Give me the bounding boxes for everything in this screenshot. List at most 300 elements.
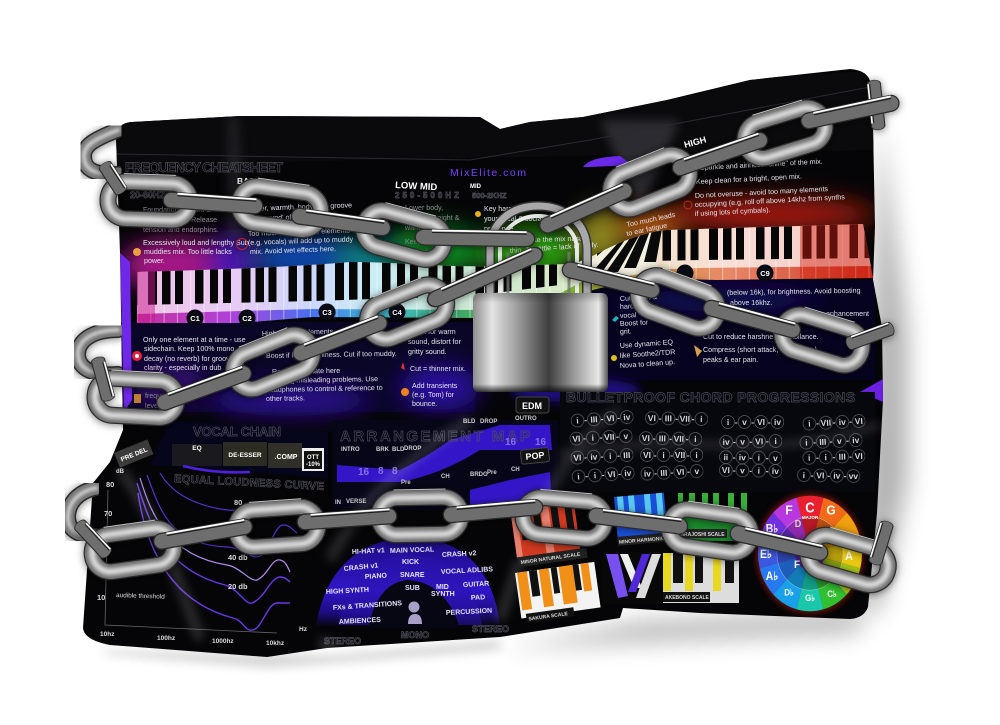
stereo field diagram: SUB xyxy=(405,585,420,592)
glossy fold highlights xyxy=(120,410,880,660)
keyboard octave markers: C1 xyxy=(190,314,200,323)
text block: bass: Power, warmth, body, and groove xyxy=(247,201,352,213)
chord row 4: - xyxy=(654,468,657,478)
module: pre delay: PRE DEL xyxy=(120,446,149,463)
chord row 4: - xyxy=(670,467,674,477)
chord row 2: - xyxy=(653,433,656,443)
chord row 4: v xyxy=(740,465,745,475)
chord row 2: VI xyxy=(755,436,763,446)
text block: mid xyxy=(484,205,676,255)
chord row 2: - xyxy=(829,436,833,446)
chord row 3: - xyxy=(687,450,690,460)
chord row 2: VII xyxy=(604,432,615,442)
chord row 4: VI xyxy=(676,467,685,477)
chord row 2: iv xyxy=(852,435,860,445)
chord row 3: VI xyxy=(855,451,863,461)
chord row 2: - xyxy=(616,431,619,442)
text block: mid: Too much leads xyxy=(626,211,676,229)
stereo field diagram: HIGH SYNTH xyxy=(326,587,369,596)
heading: frequency band names: 20-60HZ xyxy=(130,190,166,200)
chord row 4: - xyxy=(585,471,589,481)
arrangement panel: Pre xyxy=(487,470,497,476)
text block: bass tips: Higher mono elements xyxy=(262,327,334,338)
circle of fifths: C xyxy=(805,500,815,516)
chord row 2: VI xyxy=(572,433,581,444)
chord row 1: - xyxy=(832,417,836,427)
keyboard zebra fold xyxy=(592,232,655,286)
arrangement panel: CH xyxy=(441,474,450,480)
text block: high: Keep clean for a bright, open mix. xyxy=(696,172,802,186)
chord row 4: iv xyxy=(644,468,651,479)
text block: low mid: free mix. xyxy=(405,248,432,256)
scale: minor harmonic: MINOR HARMONIC SCALE xyxy=(619,534,684,546)
chord row 4: iv xyxy=(624,468,632,478)
module: OTT: OTT xyxy=(307,455,319,461)
text block: mid: your vocal & social xyxy=(484,215,544,223)
chord row 3: i xyxy=(808,453,811,463)
chord row 1: - xyxy=(600,414,604,424)
text block: low mid: warmth. xyxy=(404,224,430,232)
chord row 1: VI xyxy=(648,413,656,423)
stereo field diagram: PIANO xyxy=(365,572,388,581)
chain: bottom xyxy=(79,488,895,589)
text block: mid tips: like Soothe2/TDR xyxy=(620,348,676,360)
text block: sub tips: clarity - especially in dub xyxy=(144,364,221,372)
chord row 3: i xyxy=(609,451,612,461)
arrangement panel: 8 xyxy=(378,466,384,477)
stereo field diagram: MAIN VOCAL xyxy=(390,546,435,555)
text block: high tips: Compress (short attack, aggressive) xyxy=(703,346,817,354)
text block: low mid tips: (e.g. Tom) for xyxy=(412,391,455,399)
chord row 1: III xyxy=(590,414,598,425)
equal loudness chart: Hz xyxy=(299,626,308,633)
chain: lower hook behind bag xyxy=(68,488,96,536)
stereo field diagram: FXs & TRANSITIONS xyxy=(333,600,403,612)
circle of fifths: MAJOR xyxy=(802,515,819,521)
chord row 3: - xyxy=(617,450,620,461)
chord row 2 xyxy=(569,429,863,450)
arrangement panel: BRK xyxy=(376,447,390,453)
bag shadow xyxy=(500,120,908,648)
keyboard octave markers: C2 xyxy=(242,314,252,323)
text block: sub bass: power. xyxy=(144,257,165,265)
heading: frequency band names xyxy=(130,134,707,200)
text block: high: Sparkle and airiness "shine" of the mix. xyxy=(700,158,823,172)
heading: frequency band names: 250-500HZ xyxy=(395,191,459,200)
chord row 2: i xyxy=(591,433,594,443)
chord row 2: VII xyxy=(674,434,684,444)
chord row 4: - xyxy=(687,466,690,477)
text block: bass tips: Boost if lacking fullness. Cut if too muddy. xyxy=(266,350,397,360)
scale: minor natural: MINOR NATURAL SCALE xyxy=(520,552,581,566)
module: de-esser xyxy=(223,442,267,466)
chord row 3: i xyxy=(695,450,698,460)
chord row 3: v xyxy=(773,453,778,463)
chord row 1: - xyxy=(617,413,620,423)
text block: low mid: Keep clean to xyxy=(405,238,448,246)
chord row 1: iv xyxy=(774,417,781,427)
stereo field diagram: SYNTH xyxy=(431,591,455,598)
chord row 1: - xyxy=(659,413,662,423)
circle of fifths: A♭ xyxy=(766,571,778,583)
stereo field diagram: AMBIENCES xyxy=(339,617,381,626)
icon: listener xyxy=(408,602,422,624)
arrangement panel: OUTRO xyxy=(515,416,537,422)
text block: sub tips: sidechain. Keep 100% mono. Short xyxy=(144,345,255,353)
scale: purple xyxy=(602,552,662,604)
text block: mid tips: Nova to clean up. xyxy=(620,358,675,370)
arrangement panel: Pre xyxy=(401,480,411,486)
chord row 1: - xyxy=(692,414,695,424)
text block: bass tips xyxy=(262,327,397,403)
chord row 3: VII xyxy=(675,450,685,460)
heading: vocal chain: VOCAL CHAIN xyxy=(193,424,281,439)
chord row 4: - xyxy=(601,470,605,480)
text block: high tips: Cut to reduce harshness & sibilance. xyxy=(703,333,819,341)
text block: bass: (e.g. vocals) will add up to muddy xyxy=(248,235,354,247)
heading: frequency cheat sheet: FREQUENCY CHEATSHEET xyxy=(125,159,283,175)
circle of fifths: D♭ xyxy=(784,587,794,598)
chord row 3: - xyxy=(832,452,836,462)
heading: frequency band names: HIGH xyxy=(683,134,707,150)
chord row 4: i xyxy=(593,470,596,480)
chain: middle hook behind bag xyxy=(78,330,118,374)
text block: low mid tips: gritty sound. xyxy=(408,348,447,356)
keyboard octave markers: C4 xyxy=(392,308,403,317)
text block: bass tips: headphones to control & reference to xyxy=(266,384,383,394)
chord row 4: v xyxy=(694,466,700,476)
chord row 4: - xyxy=(766,466,769,476)
chord row 2: - xyxy=(766,436,769,446)
text block: sub tips: decay (no reverb) for groove & xyxy=(144,355,240,363)
equal loudness chart: 70 xyxy=(104,509,112,518)
text block: bass: mix. Avoid wet effects here. xyxy=(250,245,336,256)
equal loudness chart xyxy=(97,469,324,647)
stereo field diagram: HI-HAT v1 xyxy=(352,547,385,556)
chord row 4: - xyxy=(811,470,814,480)
chord row 3: - xyxy=(654,450,657,460)
chain: lower left diagonal to padlock xyxy=(94,249,535,419)
chord row 1: III xyxy=(665,413,672,423)
text block: mid: thin. Too little = lack of body. xyxy=(510,241,599,255)
chord row 2: i xyxy=(694,434,697,444)
circle of fifths: E♭ xyxy=(760,548,772,561)
chord row 4: i xyxy=(803,470,805,480)
chord row 2: - xyxy=(749,436,752,446)
bag shadow bottom xyxy=(100,640,500,668)
text block: bass xyxy=(247,201,354,256)
chord row 2: - xyxy=(733,437,736,447)
equal loudness chart: audible threshold xyxy=(116,592,165,601)
label: EDM: EDM xyxy=(522,401,542,411)
equal loudness chart: 10khz xyxy=(266,640,285,647)
text block: mid: Key harmonics of xyxy=(484,205,539,213)
chord row 2: v xyxy=(837,436,842,446)
stereo field diagram: GUITAR xyxy=(463,581,489,589)
scale: minor natural xyxy=(510,498,588,567)
chord row 3: i xyxy=(758,453,760,463)
chain: padlock to right side xyxy=(570,263,891,370)
text block: low mid tips: Add transients xyxy=(412,382,458,390)
module: pre delay xyxy=(114,439,153,468)
label: EDM xyxy=(516,397,549,413)
scale: sakura: SAKURA SCALE xyxy=(528,611,569,623)
text block: high tips: peaks & ear pain. xyxy=(703,356,758,364)
text block: bass: Too much compressed elements xyxy=(248,226,351,238)
arrangement panel: CH xyxy=(511,467,520,473)
chord row 2: - xyxy=(686,434,689,444)
chord row 2: iv xyxy=(722,437,730,447)
arrangement panel: INTRO xyxy=(341,447,360,453)
arrangement panel: BLD xyxy=(392,447,405,453)
chord row 3: - xyxy=(749,453,752,463)
text block: low mid tips: Boost for warm xyxy=(408,328,456,336)
chord row 4: - xyxy=(844,471,847,481)
text block: low mid tips xyxy=(408,328,466,408)
chord row 3: ii xyxy=(723,452,728,462)
arrangement panel: 8 xyxy=(392,466,398,477)
chord row 3: - xyxy=(600,451,604,461)
text block: sub tips xyxy=(143,336,246,408)
circle of fifths: D xyxy=(795,518,801,530)
vocal chain panel xyxy=(114,420,328,478)
colour glows above the keyboard xyxy=(120,199,875,295)
text block: low mid tips: Cut = thinner mix. xyxy=(410,365,466,373)
arrangement panel: DROP xyxy=(404,446,421,452)
text block: sub bass: muddies mix. Too little lacks xyxy=(144,248,232,256)
bag: frequency cheat sheet poster xyxy=(70,60,900,670)
chord row 1: - xyxy=(849,416,852,427)
scale: akebono xyxy=(663,553,739,603)
module: de-esser: DE-ESSER xyxy=(228,452,262,459)
arrangement panel: BRDG xyxy=(470,472,488,478)
chord row 4 xyxy=(571,463,860,484)
chord row 2: III xyxy=(659,433,666,443)
lower panel glows xyxy=(120,156,890,416)
chord row 4: - xyxy=(827,471,830,481)
chord row 3: iv xyxy=(739,452,746,462)
text block: low mid: warmth, weight & xyxy=(404,214,460,222)
chord row 4: i xyxy=(758,466,760,476)
equal loudness chart: 80 xyxy=(234,498,242,507)
chord row 2: - xyxy=(599,432,603,442)
chord row 4: - xyxy=(749,466,752,476)
chord row 3: - xyxy=(733,452,736,462)
circle of fifths: F xyxy=(794,558,801,571)
chord row 1: v xyxy=(742,417,747,427)
text block: low mid tips: bounce. xyxy=(412,400,437,408)
equal loudness chart: 1000hz xyxy=(212,638,234,645)
arrangement panel: BLD xyxy=(463,419,476,425)
stereo field diagram: STEREO xyxy=(324,636,361,646)
chord row 4: III xyxy=(660,468,668,478)
heading: frequency band names: MID xyxy=(470,184,482,190)
chain: top hook behind bag xyxy=(84,130,118,174)
chord row 1: - xyxy=(768,417,771,427)
text block: mid tips: hard mids xyxy=(620,301,652,311)
chord row 1: iv xyxy=(623,412,631,422)
chord row 3: - xyxy=(766,453,769,463)
chord row 1: VI xyxy=(606,413,615,423)
scale: akebono: AKEBONO SCALE xyxy=(665,595,710,601)
text block: low mid: Lower body, xyxy=(405,204,443,212)
text block: sub bass: tension and endorphins. xyxy=(143,226,219,234)
chord row 1: - xyxy=(735,417,738,427)
stereo field diagram: PAD xyxy=(471,594,485,602)
chord row 2: v xyxy=(623,431,629,441)
chord row 2: - xyxy=(846,435,849,446)
text block: mid tips: Cut harsh & xyxy=(620,293,658,303)
chord row 3: i xyxy=(824,452,827,462)
chord row 1: iv xyxy=(839,417,846,427)
equal loudness chart: 10hz xyxy=(100,631,115,638)
text block: sub tips: Only one element at a time - use xyxy=(143,336,246,344)
top black gloss folds xyxy=(116,70,880,240)
module: comp xyxy=(268,443,302,468)
circle of fifths: G♭ xyxy=(805,593,815,603)
stereo field diagram: PERCUSSION xyxy=(446,608,492,617)
text block: mid tips: Use dynamic EQ xyxy=(620,338,674,350)
module: comp: .COMP xyxy=(275,454,298,461)
equal loudness chart: 80 xyxy=(106,480,114,489)
chord row 1: i xyxy=(808,419,811,429)
chord row 1: VII xyxy=(680,414,690,424)
text block: sub tips: frequency xyxy=(145,392,177,400)
text block: mid tips: Boost for xyxy=(620,318,649,328)
text block: low mid xyxy=(405,204,460,251)
text block: sub tips: levels xyxy=(145,402,164,410)
chord row 1: - xyxy=(675,414,678,424)
chord row 1: VII xyxy=(820,417,831,428)
stereo field diagram: MONO xyxy=(401,630,429,640)
module: OTT: -10% xyxy=(306,462,321,468)
chord row 1: - xyxy=(751,417,754,427)
keyboard octave markers: C3 xyxy=(322,308,332,317)
heading: frequency band names: BASS xyxy=(237,176,261,186)
chord row 3 xyxy=(570,448,865,465)
chord row 3: III xyxy=(839,451,846,462)
text block: bass tips: Rooms resonate here xyxy=(272,367,340,376)
text block: high tips xyxy=(703,287,869,364)
arrangement panel: 16 xyxy=(505,437,517,448)
stereo field diagram: CRASH v1 xyxy=(343,562,379,573)
chord row 2: - xyxy=(583,433,586,443)
scale: sakura xyxy=(515,562,601,624)
text block: high: if using lots of cymbals). xyxy=(695,206,771,218)
chord row 3: - xyxy=(670,450,673,460)
chain: top left to padlock xyxy=(104,163,527,263)
chord row 4: iv xyxy=(772,466,779,476)
text block: sub bass: Excessively loud and lengthy Sub xyxy=(143,239,249,247)
chord row 1: - xyxy=(816,418,819,428)
text block: bass: 'the ground' of mix. xyxy=(247,213,307,223)
arrangement panel: VERSE xyxy=(346,499,366,505)
chord row 3: - xyxy=(816,452,819,463)
chord row 3: III xyxy=(623,450,631,460)
chord row 2: i xyxy=(805,438,808,448)
stereo field diagram: KICK xyxy=(402,559,419,566)
keyboard strip xyxy=(137,224,873,323)
text block: mid: presence. xyxy=(484,225,515,233)
brand: MixElite.com: MixElite.com xyxy=(450,167,526,179)
label: POP: POP xyxy=(525,450,545,462)
chord row 3: - xyxy=(584,452,587,462)
stereo field diagram: SNARE xyxy=(400,572,425,579)
circle of fifths: A xyxy=(845,550,854,563)
keyboard octave markers xyxy=(186,264,774,326)
chord row 1: VI xyxy=(757,417,765,427)
small tip icons xyxy=(132,201,702,403)
text block: mid tips xyxy=(620,293,676,370)
label: POP xyxy=(520,447,550,464)
circle of fifths: F xyxy=(785,503,793,518)
chord row 2: i xyxy=(774,436,777,446)
chord row 4: iv xyxy=(833,471,841,481)
chord row 3: VI xyxy=(573,452,582,463)
text block: high: occupying (e.g. roll off above 14khz from synths xyxy=(695,193,845,209)
chord progressions panel xyxy=(560,392,875,484)
module: EQ xyxy=(172,444,222,466)
chord row 4: i xyxy=(577,471,580,482)
arrangement panel: DROP xyxy=(480,419,497,425)
heading: frequency band names: LOW MID xyxy=(395,180,438,193)
equal loudness chart: 100hz xyxy=(157,635,176,642)
chord row 2: VI xyxy=(642,433,650,443)
scale: green xyxy=(675,493,747,541)
text block: mid tips: grit. xyxy=(620,327,632,336)
chord row 2: v xyxy=(740,437,745,447)
arrangement panel: 16 xyxy=(535,437,547,448)
text block: high tips: above 16khz. xyxy=(730,299,772,307)
equal loudness chart: 40 db xyxy=(228,553,248,562)
heading: arrangement map: ARRANGEMENT MAP xyxy=(340,428,530,445)
circle of fifths: C♭ xyxy=(827,588,837,599)
chord row 3: VI xyxy=(643,450,651,460)
text block: low mid tips: sound, distort for xyxy=(408,338,461,346)
chord row 4: - xyxy=(733,465,736,475)
heading: frequency band names: 500-2KHZ xyxy=(472,191,507,200)
equal loudness chart: 10 xyxy=(97,593,105,602)
padlock shackle xyxy=(490,206,587,296)
chord row 2: - xyxy=(669,434,672,444)
text block: mid: to ear fatigue xyxy=(626,222,668,238)
chord row 4: VI xyxy=(607,469,616,479)
text block: bass tips: causing misleading problems. Use xyxy=(270,375,378,385)
text block: sub bass xyxy=(143,206,249,265)
module: OTT xyxy=(302,448,324,471)
circle of fifths: G xyxy=(826,503,836,518)
text block: mid: can make the mix nasal xyxy=(510,234,585,245)
chord row 4: VI xyxy=(816,470,824,480)
chord row 2: - xyxy=(813,437,816,447)
equal loudness chart: 20 db xyxy=(228,582,248,591)
chord row 2: III xyxy=(819,437,827,447)
stereo field diagram: CRASH v2 xyxy=(442,550,477,559)
chord row 3: iv xyxy=(590,452,598,462)
text block: bass tips: other tracks. xyxy=(266,394,305,403)
scale: minor harmonic xyxy=(614,491,684,546)
chord row 4: VI xyxy=(722,465,730,475)
circle of fifths: B♭ xyxy=(766,523,778,536)
text block: high tips: enhancement xyxy=(826,310,869,318)
chord row 1: i xyxy=(576,415,579,426)
chain: padlock to top right xyxy=(545,83,892,226)
equal loudness chart: dB xyxy=(116,469,125,475)
text block: mid tips: vocal xyxy=(620,311,637,320)
chord row 3: - xyxy=(849,451,852,461)
stereo field diagram: STEREO xyxy=(472,624,509,634)
chord row 1: VI xyxy=(855,416,863,426)
